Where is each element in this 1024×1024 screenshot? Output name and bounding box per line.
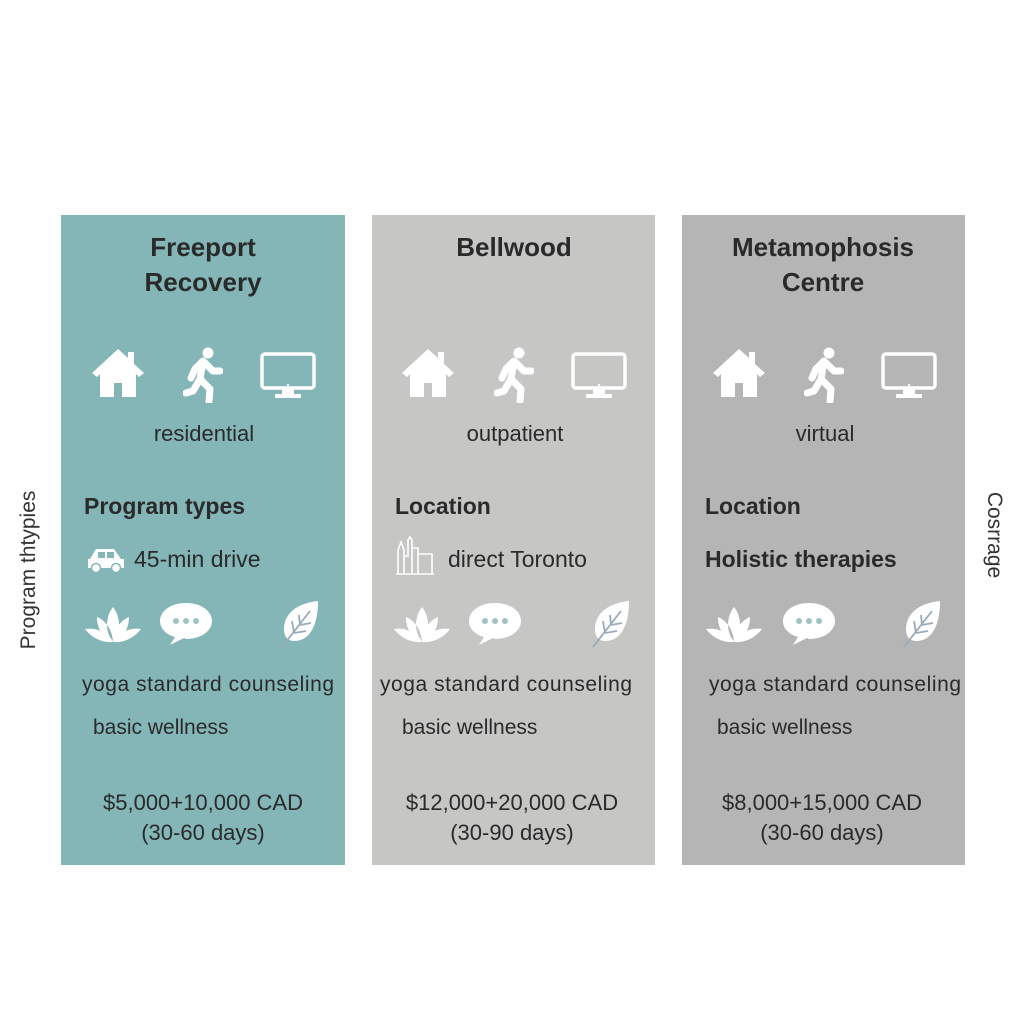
panel: Freeport Recovery: Recovery: [144, 267, 262, 297]
therapies text: yoga standard counseling: [82, 673, 334, 696]
therapy icons: [394, 601, 629, 647]
panel: Freeport Recovery: (30-60 days): [141, 820, 265, 845]
icons: program types: [402, 348, 625, 401]
panel: Metamophosis Centre: basic wellness: [717, 716, 852, 739]
price: $8,000+15,000 CAD: [722, 790, 922, 815]
heading: Location: [395, 493, 491, 519]
panel: Metamophosis Centre: [682, 215, 965, 865]
therapy icons: [706, 601, 940, 647]
therapies text: yoga standard counseling: [709, 673, 961, 696]
icons: program types: [713, 348, 935, 401]
panel: Freeport Recovery: [61, 215, 345, 865]
side label left: Program thtypies: [17, 491, 40, 649]
panel: Freeport Recovery: basic wellness: [93, 716, 228, 739]
heading: holistic: Holistic therapies: [705, 546, 897, 572]
price: $12,000+20,000 CAD: [406, 790, 618, 815]
type label: virtual: [796, 421, 854, 446]
location: direct Toronto: [448, 546, 587, 572]
heading: Program types: [84, 493, 245, 519]
type label: outpatient: [467, 421, 563, 446]
icons: program types: [92, 348, 314, 401]
panel: Bellwood: (30-90 days): [450, 820, 574, 845]
location: 45-min drive: [134, 546, 261, 572]
panel: Metamophosis Centre: (30-60 days): [760, 820, 884, 845]
type label: residential: [154, 421, 254, 446]
panel: Bellwood: [372, 215, 655, 865]
side label right: Cosrrage: [983, 492, 1006, 578]
title: Metamophosis: [732, 232, 914, 262]
panel: Metamophosis Centre: Centre: [782, 267, 864, 297]
therapies text: yoga standard counseling: [380, 673, 632, 696]
title: Bellwood: [456, 232, 572, 262]
heading: Location: [705, 493, 801, 519]
location: [396, 537, 587, 574]
title: Freeport: [150, 232, 256, 262]
panel: Bellwood: basic wellness: [402, 716, 537, 739]
price: $5,000+10,000 CAD: [103, 790, 303, 815]
therapy icons: [85, 601, 318, 647]
